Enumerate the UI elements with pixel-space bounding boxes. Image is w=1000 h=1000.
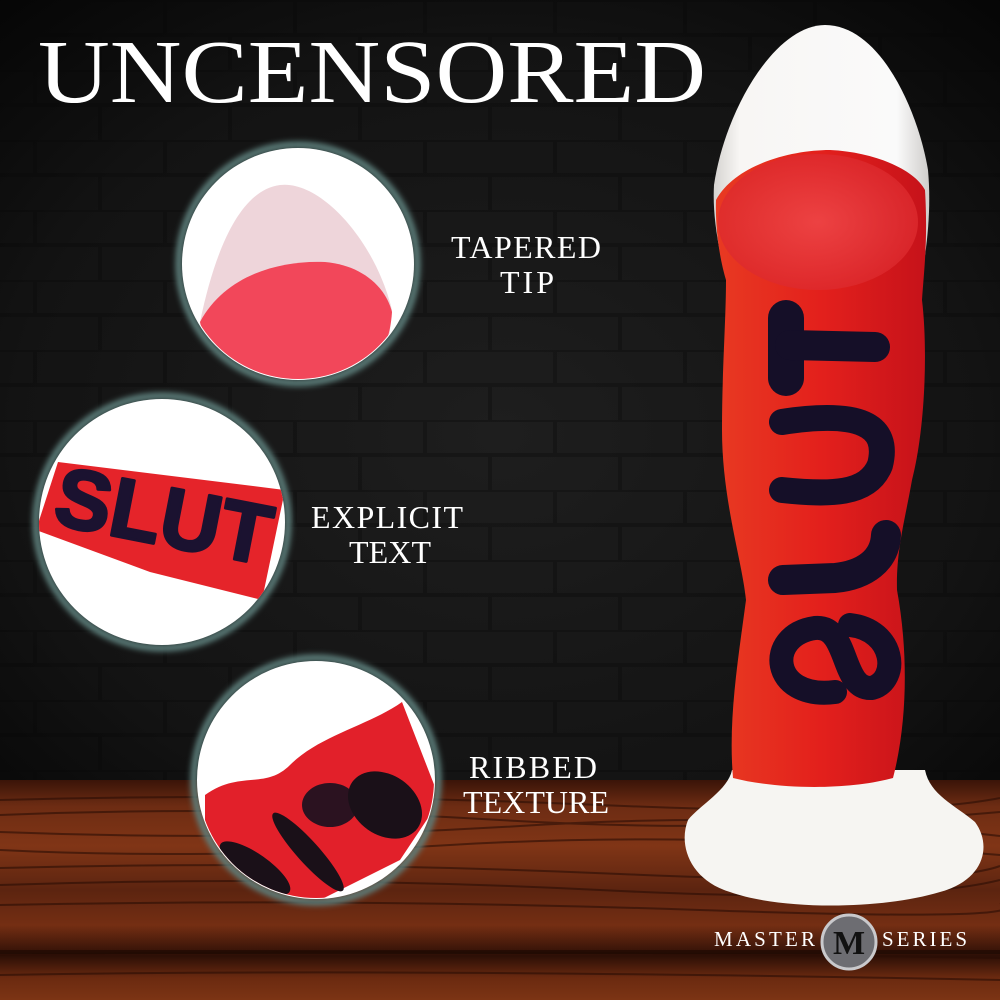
label: explicit text: TEXT [349,534,431,570]
callout: explicit text: SLUT [48,449,280,583]
product lettering [781,318,889,693]
product head highlight [718,154,918,290]
product base [685,770,983,906]
label: tapered tip: TIP [500,264,554,300]
label: ribbed texture: TEXTURE [463,784,609,820]
callout: ribbed texture [194,658,440,904]
callout: tapered tip [179,145,417,383]
callout: explicit text [36,396,288,648]
background: brick wall [0,0,1000,790]
background: wood table [0,780,1000,1000]
title: UNCENSORED [38,23,706,122]
logo: Master Series: MASTER [714,927,816,951]
label: ribbed texture: RIBBED [469,749,597,785]
logo: Master Series [714,915,968,969]
product clear upper [714,25,929,310]
label: ribbed texture [463,749,609,820]
label: explicit text: EXPLICIT [311,499,463,535]
logo: Master Series: M [833,925,865,962]
product [685,25,983,906]
label: explicit text [311,499,463,570]
label: tapered tip: TAPERED [451,229,601,265]
label: tapered tip [451,229,601,300]
logo: Master Series: SERIES [882,927,968,951]
product red core [716,150,926,787]
